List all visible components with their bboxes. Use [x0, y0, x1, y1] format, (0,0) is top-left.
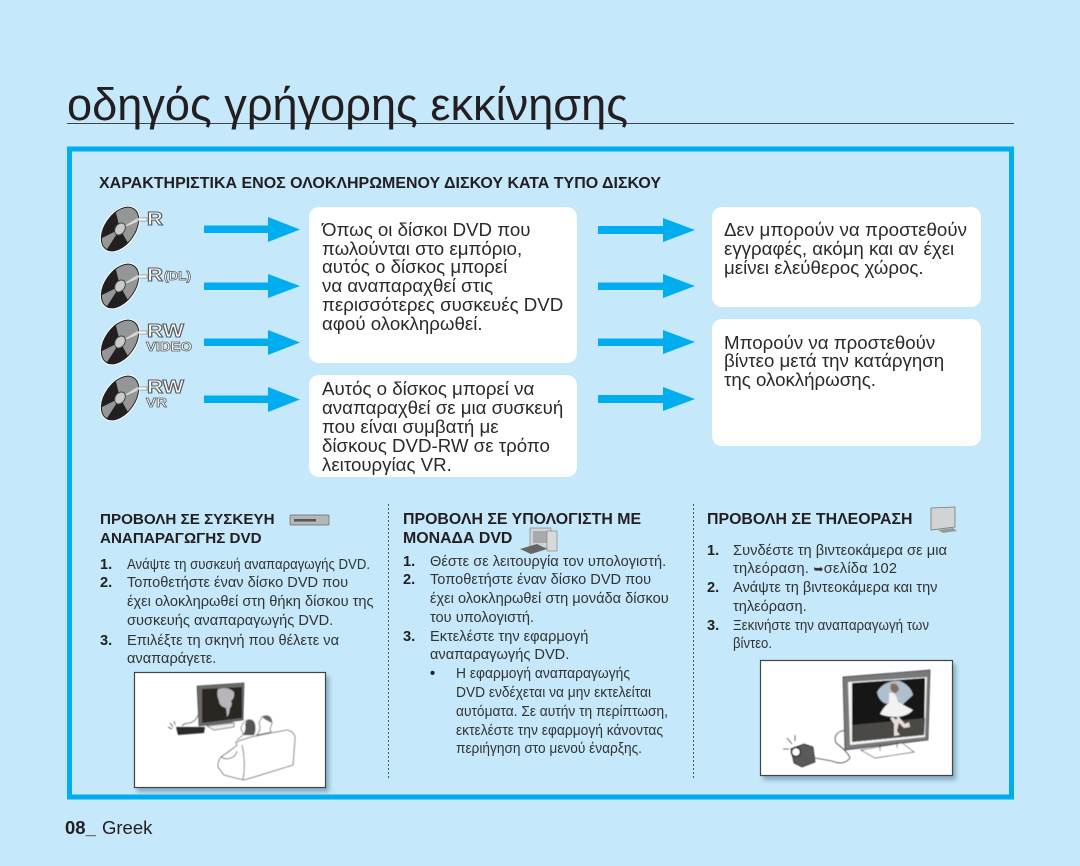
column dividers [388, 504, 694, 778]
column heading: ΠΡΟΒΟΛΗ ΣΕ ΣΥΣΚΕΥΗ [100, 511, 275, 528]
steps: DVD ενδέχεται να μην εκτελείται [456, 685, 651, 701]
steps: 2. [100, 575, 112, 591]
steps: 3. [707, 618, 719, 634]
description box: VR mode playback: Αυτός ο δίσκος μπορεί να [322, 378, 534, 399]
steps: 2. [403, 572, 415, 588]
column heading [100, 511, 275, 547]
page number footer: Greek [102, 817, 153, 838]
icon: DVD-RW video disc: RW [147, 321, 184, 341]
result box: cannot add recordings [712, 207, 981, 307]
result box: can add video [712, 319, 981, 446]
description box: finalised playback: περισσότερες συσκευές DVD [322, 294, 563, 315]
steps: Επιλέξτε τη σκηνή που θέλετε να [127, 633, 340, 649]
steps: Θέστε σε λειτουργία τον υπολογιστή. [430, 554, 666, 570]
column heading: ΑΝΑΠΑΡΑΓΩΓΗΣ DVD [100, 530, 262, 547]
steps: τηλεόραση. [733, 599, 807, 615]
arrows: discs to descriptions [204, 217, 300, 412]
steps: εκτελέστε την εφαρμογή κάνοντας [456, 723, 663, 739]
column heading: ΜΟΝΑΔΑ DVD [403, 530, 512, 547]
steps: έχει ολοκληρωθεί στη μονάδα δίσκου [430, 591, 669, 607]
page number footer [65, 817, 153, 838]
steps: 3. [100, 633, 112, 649]
steps: Ανάψτε τη βιντεοκάμερα και την [733, 580, 937, 596]
result box: can add video: της ολοκλήρωσης. [724, 369, 876, 390]
description box: finalised playback: Όπως οι δίσκοι DVD που [321, 219, 530, 240]
steps [403, 554, 669, 757]
title: οδηγός γρήγορης εκκίνησης [67, 79, 628, 130]
column heading: ΠΡΟΒΟΛΗ ΣΕ ΥΠΟΛΟΓΙΣΤΗ ΜΕ [403, 511, 641, 528]
icon: DVD player [290, 515, 329, 525]
illustration: camcorder connected to TV [760, 660, 956, 780]
description box: VR mode playback: που είναι συμβατή με [322, 416, 499, 437]
steps: Τοποθετήστε έναν δίσκο DVD που [430, 572, 651, 588]
result box: cannot add recordings: μείνει ελεύθερος χώρος. [724, 257, 924, 278]
steps: του υπολογιστή. [430, 610, 534, 626]
page number footer: 08_ [65, 817, 97, 838]
steps: βίντεο. [733, 636, 772, 652]
steps: 1. [100, 557, 112, 573]
icon: DVD-R DL disc: R [147, 265, 163, 285]
description box: VR mode playback: δίσκους DVD-RW σε τρόπο [322, 435, 550, 456]
section heading: disc characteristics: ΧΑΡΑΚΤΗΡΙΣΤΙΚΑ ΕΝΟΣ ΟΛΟΚΛΗΡΩΜΕΝΟΥ ΔΙΣΚΟΥ ΚΑΤΑ ΤΥΠΟ ΔΙΣΚΟΥ [99, 175, 661, 192]
description box: VR mode playback: λειτουργίας VR. [322, 454, 452, 475]
icon: DVD-RW VR disc: RW [147, 377, 184, 397]
icon: desktop computer [520, 528, 557, 554]
steps: 1. [403, 554, 415, 570]
result box: can add video: βίντεο μετά την κατάργηση [724, 350, 944, 371]
arrows: descriptions to results [598, 218, 695, 411]
steps: αναπαράγετε. [127, 651, 216, 667]
description box: VR mode playback [309, 375, 577, 477]
icon: DVD-R disc: R [147, 209, 163, 229]
icon: DVD-R disc [90, 197, 163, 261]
steps: 2. [707, 580, 719, 596]
steps: Η εφαρμογή αναπαραγωγής [456, 666, 630, 682]
steps: αυτόματα. Σε αυτήν τη περίπτωση, [456, 704, 668, 720]
steps: περιήγηση στο μενού έναρξης. [456, 741, 642, 757]
column: computer playback [403, 511, 669, 757]
icon: DVD-RW VR disc [90, 366, 184, 430]
steps: Ανάψτε τη συσκευή αναπαραγωγής DVD. [127, 557, 370, 573]
icon: DVD-RW video disc: VIDEO [146, 340, 192, 354]
description box: finalised playback: αφού ολοκληρωθεί. [322, 313, 483, 334]
steps: Ξεκινήστε την αναπαραγωγή των [733, 618, 929, 634]
steps: Συνδέστε τη βιντεοκάμερα σε μια [733, 543, 948, 559]
icon: DVD-RW video disc [90, 310, 192, 374]
result box: cannot add recordings: Δεν μπορούν να προστεθούν [724, 219, 967, 240]
description box: finalised playback: πωλούνται στο εμπόριο, [322, 238, 522, 259]
result box: cannot add recordings: εγγραφές, ακόμη και αν έχει [724, 238, 954, 259]
column heading [403, 511, 641, 547]
main panel frame [70, 149, 1012, 797]
description box: finalised playback: να αναπαραχθεί στις [322, 275, 493, 296]
column heading: ΠΡΟΒΟΛΗ ΣΕ ΤΗΛΕΟΡΑΣΗ [707, 511, 913, 528]
description box: finalised playback [309, 207, 577, 363]
description box: VR mode playback: αναπαραχθεί σε μια συσκευή [322, 397, 563, 418]
steps [100, 557, 374, 667]
steps: έχει ολοκληρωθεί στη θήκη δίσκου της [127, 594, 374, 610]
result box: can add video: Μπορούν να προστεθούν [724, 332, 935, 353]
steps: Τοποθετήστε έναν δίσκο DVD που [127, 575, 348, 591]
column: DVD player playback [100, 511, 374, 792]
steps: συσκευής αναπαραγωγής DVD. [127, 613, 333, 629]
steps: 1. [707, 543, 719, 559]
steps: αναπαραγωγής DVD. [430, 647, 569, 663]
icon: DVD-RW VR disc: VR [146, 396, 167, 410]
icon: DVD-R DL disc [90, 254, 191, 318]
steps: 3. [403, 629, 415, 645]
icon: TV [931, 507, 957, 533]
description box: finalised playback: αυτός ο δίσκος μπορεί [322, 256, 507, 277]
steps: τηλεόραση. ➥σελίδα 102 [733, 561, 897, 577]
steps [707, 543, 948, 652]
steps: • [430, 666, 435, 682]
column: TV playback [707, 507, 957, 780]
steps: Εκτελέστε την εφαρμογή [430, 629, 588, 645]
illustration: couple watching TV with DVD player [134, 672, 329, 792]
icon: DVD-R DL disc: (DL) [164, 269, 191, 283]
